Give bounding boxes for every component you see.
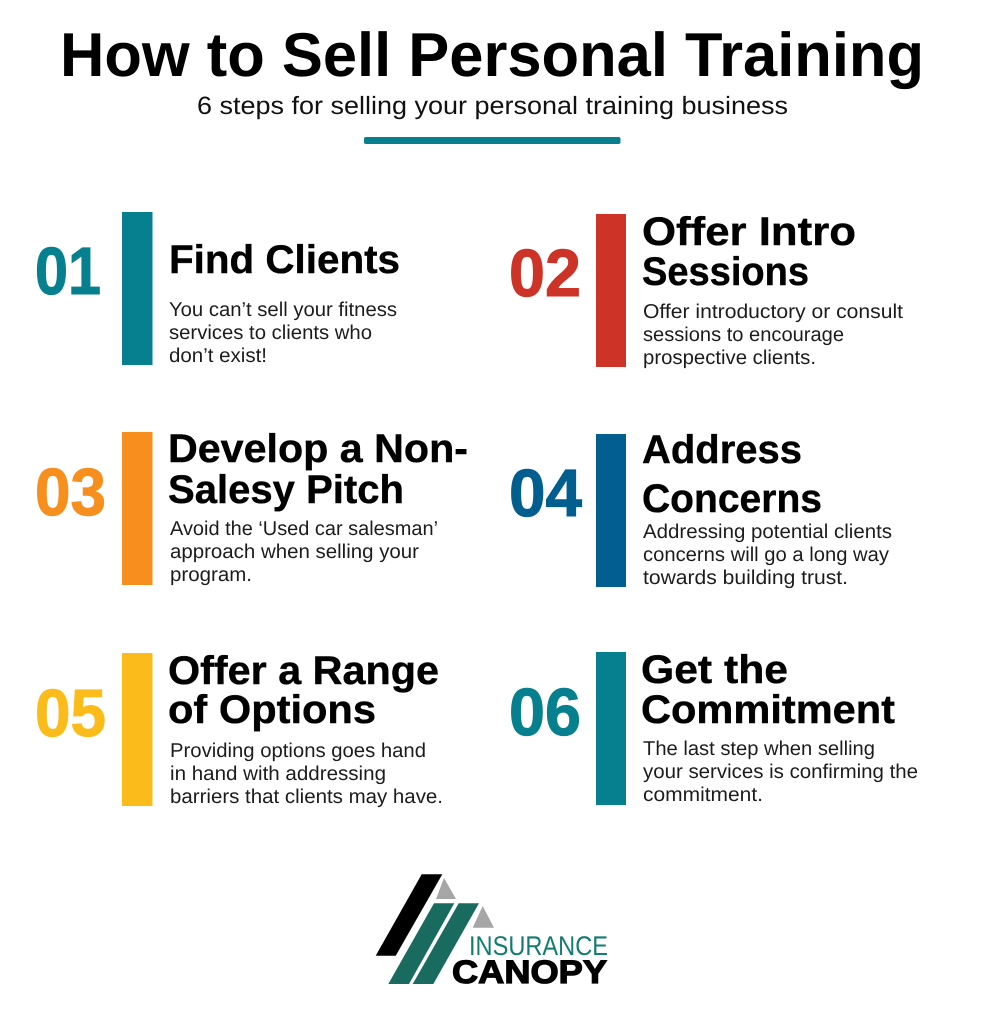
heading 02: Offer Intro (642, 210, 856, 254)
heading 06 (641, 648, 895, 732)
icon: grey triangle right (473, 906, 494, 928)
panel: step 06 (509, 648, 918, 806)
logo word: CANOPY: CANOPY (452, 954, 607, 990)
heading 02 (642, 210, 856, 294)
number 05: 05 (35, 676, 106, 751)
heading 05: of Options (168, 688, 376, 732)
body 05: in hand with addressing (170, 763, 386, 785)
body 05: barriers that clients may have. (170, 786, 443, 808)
icon: grey triangle left (436, 878, 456, 899)
panel: step 04 (509, 428, 892, 589)
body 01: services to clients who (169, 322, 372, 344)
body 03: Avoid the ‘Used car salesman’ (170, 518, 438, 540)
bar 04 (596, 434, 626, 587)
bar 02 (596, 214, 626, 367)
panel: step 01 (35, 212, 400, 367)
body 04: towards building trust. (643, 567, 848, 589)
body 06: The last step when selling (643, 738, 875, 760)
heading 03: Develop a Non- (168, 427, 468, 471)
body 06: commitment. (643, 784, 763, 806)
logo: Insurance Canopy (376, 874, 608, 990)
panel: step 02 (509, 210, 903, 369)
body 03 (170, 518, 438, 586)
panel: step 05 (35, 649, 443, 808)
number 02: 02 (509, 236, 581, 311)
bar 06 (596, 652, 626, 805)
body 02: prospective clients. (643, 347, 816, 369)
heading 04: Concerns (642, 477, 822, 521)
heading 01: Find Clients (169, 238, 400, 282)
heading 04 (642, 428, 822, 521)
subtitle: 6 steps for selling your personal training business (197, 92, 788, 120)
body 04: concerns will go a long way (643, 544, 889, 566)
body 01 (169, 299, 397, 367)
body 04: Addressing potential clients (643, 521, 892, 543)
heading 06: Commitment (641, 688, 895, 732)
heading 02: Sessions (642, 250, 809, 294)
body 03: program. (170, 564, 252, 586)
heading 05 (168, 649, 439, 732)
body 05: Providing options goes hand (170, 740, 426, 762)
bar 01 (122, 212, 152, 365)
icon: green stripe left (388, 903, 454, 984)
title: How to Sell Personal Training (60, 21, 924, 90)
number 06: 06 (509, 675, 581, 750)
heading 03 (168, 427, 468, 512)
body 01: don’t exist! (169, 345, 267, 367)
heading 05: Offer a Range (168, 649, 439, 693)
title underline (364, 137, 620, 144)
bar 03 (122, 432, 152, 585)
heading 06: Get the (641, 648, 788, 692)
body 02: sessions to encourage (643, 324, 844, 346)
bar 05 (122, 653, 152, 806)
number 01: 01 (35, 234, 101, 309)
body 05 (170, 740, 443, 808)
body 06: your services is confirming the (643, 761, 918, 783)
logo word: INSURANCE: INSURANCE (469, 931, 608, 961)
panel: step 03 (35, 427, 468, 586)
body 04 (643, 521, 892, 589)
body 06 (643, 738, 918, 806)
body 01: You can’t sell your fitness (169, 299, 397, 321)
icon: black roof stripe (376, 874, 442, 956)
number 04: 04 (509, 456, 582, 531)
icon: green stripe right (413, 903, 479, 984)
body 02: Offer introductory or consult (643, 301, 903, 323)
heading 04: Address (642, 428, 802, 472)
body 03: approach when selling your (170, 541, 419, 563)
heading 03: Salesy Pitch (168, 468, 404, 512)
number 03: 03 (35, 455, 106, 530)
body 02 (643, 301, 903, 369)
